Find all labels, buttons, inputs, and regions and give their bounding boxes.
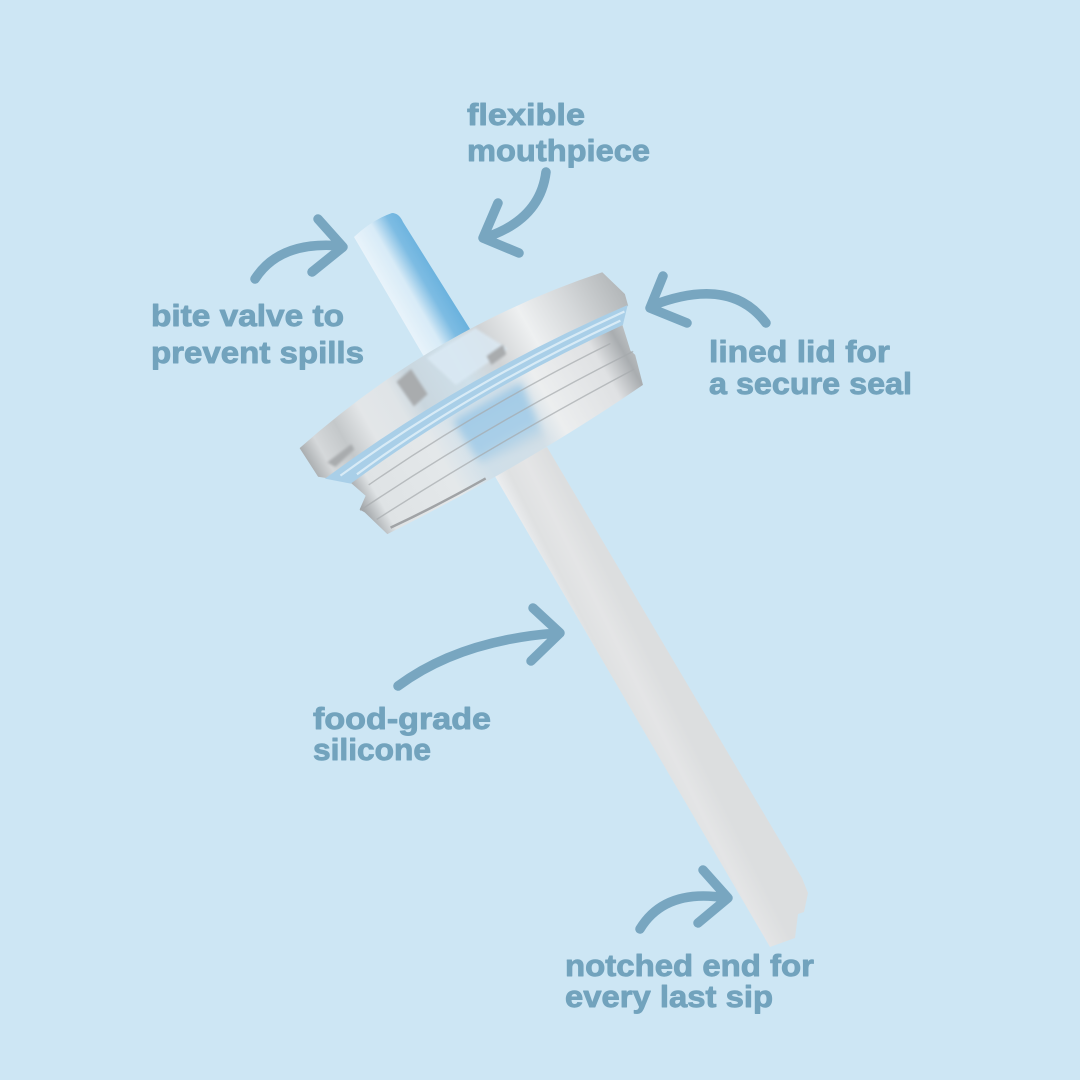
callout: flexible mouthpiece bbox=[467, 97, 650, 253]
blue see-through patch bbox=[453, 383, 552, 475]
callout: notched end bbox=[565, 870, 814, 1014]
label: silicone bbox=[313, 732, 431, 767]
label: flexible bbox=[467, 97, 585, 132]
seal highlights bbox=[336, 306, 629, 482]
thread lines bbox=[348, 333, 643, 524]
label: a secure seal bbox=[709, 366, 912, 401]
lower rim shadow bbox=[391, 475, 486, 531]
callout: lined lid bbox=[650, 276, 912, 401]
label: prevent spills bbox=[151, 335, 364, 370]
top cap bbox=[290, 254, 633, 485]
arrow bbox=[640, 870, 728, 929]
callout: bite valve bbox=[151, 219, 364, 370]
arrow bbox=[483, 172, 546, 253]
mouthpiece base seen through cap bbox=[426, 319, 511, 391]
label: lined lid for bbox=[709, 334, 890, 369]
lower silicone straw bbox=[493, 447, 808, 947]
blue silicone seal bbox=[319, 297, 637, 493]
straw product illustration bbox=[290, 213, 808, 947]
label: food-grade bbox=[313, 701, 491, 736]
arrow bbox=[398, 608, 560, 686]
lid body and threads bbox=[340, 318, 657, 543]
label: notched end for bbox=[565, 948, 814, 983]
label: bite valve to bbox=[151, 298, 344, 333]
label: every last sip bbox=[565, 979, 773, 1014]
callout: food-grade silicone bbox=[313, 608, 560, 767]
upper blue mouthpiece bbox=[354, 213, 480, 372]
lid bbox=[290, 254, 672, 554]
dark cap reflections bbox=[308, 324, 515, 469]
label: mouthpiece bbox=[467, 133, 650, 168]
arrow bbox=[255, 219, 343, 279]
arrow bbox=[650, 276, 766, 323]
